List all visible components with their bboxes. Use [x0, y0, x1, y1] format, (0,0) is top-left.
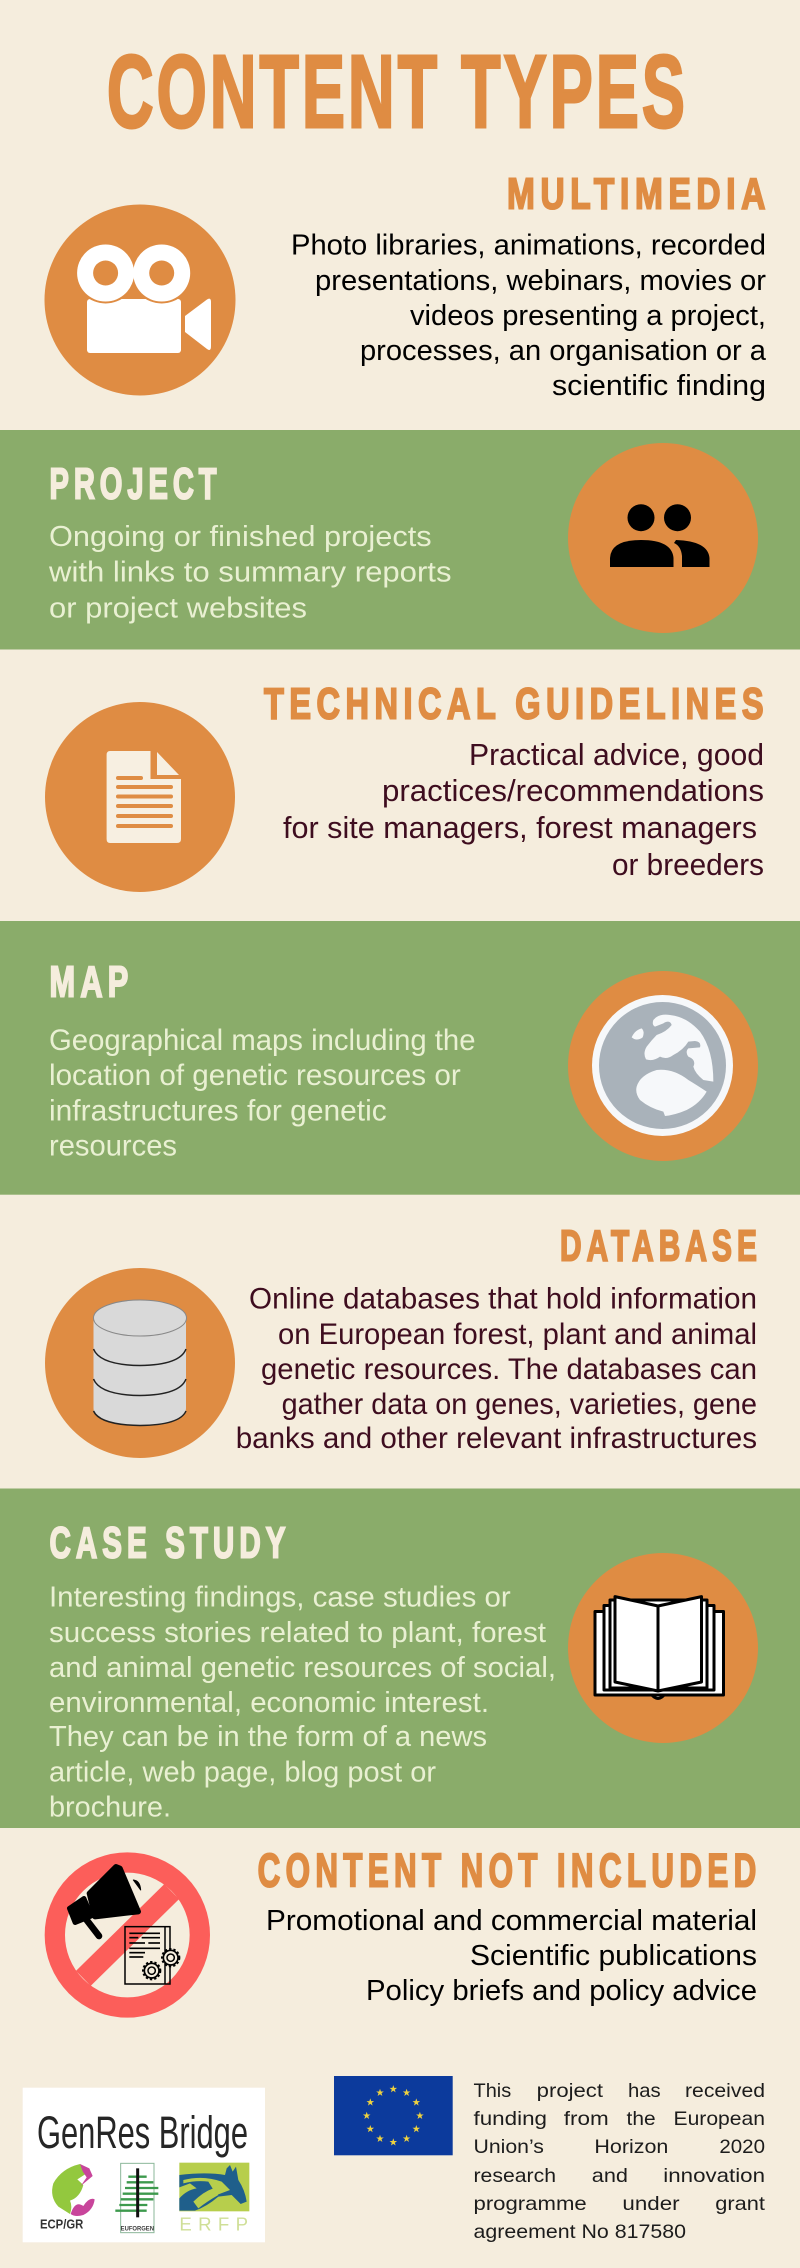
text block: funding statement: the: [626, 2108, 656, 2130]
text block: funding statement: from: [564, 2108, 609, 2130]
text block: multimedia description: [291, 230, 767, 402]
heading: case study: CASE STUDY: [50, 1518, 290, 1567]
icon: database cylinder: [45, 1268, 235, 1458]
text block: project description: with links to summary reports: [48, 557, 452, 589]
icon: prohibited promotion and publications: [55, 1862, 200, 2007]
text block: multimedia description: presentations, webinars, movies or: [315, 265, 766, 297]
panel: content not included: [55, 1843, 762, 2007]
text block: database description: Online databases that hold information: [249, 1282, 757, 1316]
text block: funding statement: European: [674, 2108, 765, 2130]
text block: funding statement: Horizon: [594, 2136, 668, 2158]
text block: case study description: [49, 1582, 556, 1824]
panel: project: [0, 430, 800, 650]
text block: project description: Ongoing or finished projects: [49, 521, 432, 553]
text block: multimedia description: scientific finding: [552, 370, 766, 402]
text block: case study description: article, web page, blog post or: [49, 1756, 436, 1788]
text block: funding statement: Union’s: [474, 2136, 544, 2158]
icon: open book: [568, 1553, 758, 1743]
text block: funding statement: research: [474, 2165, 556, 2187]
text block: funding statement: [474, 2080, 766, 2243]
panel: database: [45, 1221, 762, 1458]
text block: case study description: They can be in the form of a news: [49, 1721, 487, 1753]
heading: project: PROJECT: [50, 460, 222, 508]
text block: project description: or project websites: [49, 592, 307, 624]
panel: map: [0, 921, 800, 1195]
text block: map description: infrastructures for genetic: [49, 1094, 387, 1128]
logo: EUFORGEN: EUFORGEN: [121, 2226, 154, 2233]
logo: ERFP: ERFP: [179, 2214, 254, 2235]
text block: map description: resources: [49, 1130, 177, 1163]
text block: funding statement: innovation: [663, 2165, 765, 2187]
text block: excluded content list: [266, 1905, 757, 2007]
text block: funding statement: funding: [474, 2108, 547, 2130]
panel: multimedia: [44, 170, 771, 402]
text block: multimedia description: Photo libraries, animations, recorded: [291, 230, 766, 262]
text block: funding statement: has: [628, 2080, 661, 2102]
text block: database description: on European forest, plant and animal: [278, 1318, 757, 1351]
text block: technical guidelines description: Practical advice, good: [469, 737, 764, 772]
text block: funding statement: under: [622, 2193, 680, 2215]
text block: funding statement: 2020: [719, 2136, 765, 2158]
heading: map: MAP: [50, 958, 134, 1006]
text block: case study description: environmental, economic interest.: [49, 1687, 489, 1719]
text block: technical guidelines description: for site managers, forest managers: [283, 810, 757, 845]
logo: ERFP: [179, 2163, 254, 2235]
text block: excluded content list: Promotional and commercial material: [266, 1905, 757, 1937]
text block: case study description: brochure.: [49, 1792, 171, 1824]
text block: multimedia description: videos presenting a project,: [410, 300, 766, 332]
text block: database description: genetic resources. The databases can: [261, 1353, 757, 1386]
text block: map description: location of genetic resources or: [49, 1059, 461, 1092]
text block: funding statement: project: [537, 2080, 604, 2102]
logo: ECP/GR: [40, 2164, 95, 2232]
logo text: GenRes Bridge: GenRes Bridge: [37, 2107, 248, 2158]
logo: ECP/GR: ECP/GR: [40, 2217, 84, 2232]
panel: case study: [0, 1488, 800, 1828]
text block: case study description: success stories related to plant, forest: [49, 1617, 546, 1649]
text block: funding statement: received: [685, 2080, 765, 2102]
text block: technical guidelines description: [283, 737, 764, 882]
icon: EU flag: [334, 2076, 453, 2155]
text block: funding statement: programme: [474, 2193, 587, 2215]
text block: project description: [48, 521, 452, 624]
text block: funding statement: This: [474, 2080, 511, 2102]
text block: technical guidelines description: or breeders: [612, 847, 764, 882]
text block: funding statement: grant: [715, 2193, 766, 2215]
logo: EUFORGEN: [115, 2163, 158, 2233]
panel: technical guidelines: [45, 680, 769, 892]
text block: excluded content list: Policy briefs and policy advice: [366, 1975, 757, 2007]
text block: excluded content list: Scientific publications: [470, 1940, 757, 1972]
text block: database description: banks and other relevant infrastructures: [236, 1422, 757, 1455]
text block: case study description: Interesting findings, case studies or: [49, 1582, 511, 1614]
text block: database description: [236, 1282, 757, 1455]
logo block: GenRes Bridge and partners: [23, 2088, 265, 2242]
icon: globe: [568, 971, 758, 1161]
icon: document: [45, 702, 235, 892]
text block: case study description: and animal genetic resources of social,: [49, 1652, 556, 1684]
text block: multimedia description: processes, an organisation or a: [360, 335, 767, 367]
icon: film camera: [44, 204, 236, 396]
text block: map description: Geographical maps including the: [49, 1024, 476, 1057]
text block: funding statement: and: [592, 2165, 628, 2187]
text block: technical guidelines description: practices/recommendations: [382, 773, 764, 808]
text block: database description: gather data on genes, varieties, gene: [282, 1388, 757, 1421]
icon: people: [568, 443, 758, 633]
text block: map description: [49, 1024, 476, 1163]
text block: funding statement: agreement No 817580: [474, 2221, 686, 2243]
